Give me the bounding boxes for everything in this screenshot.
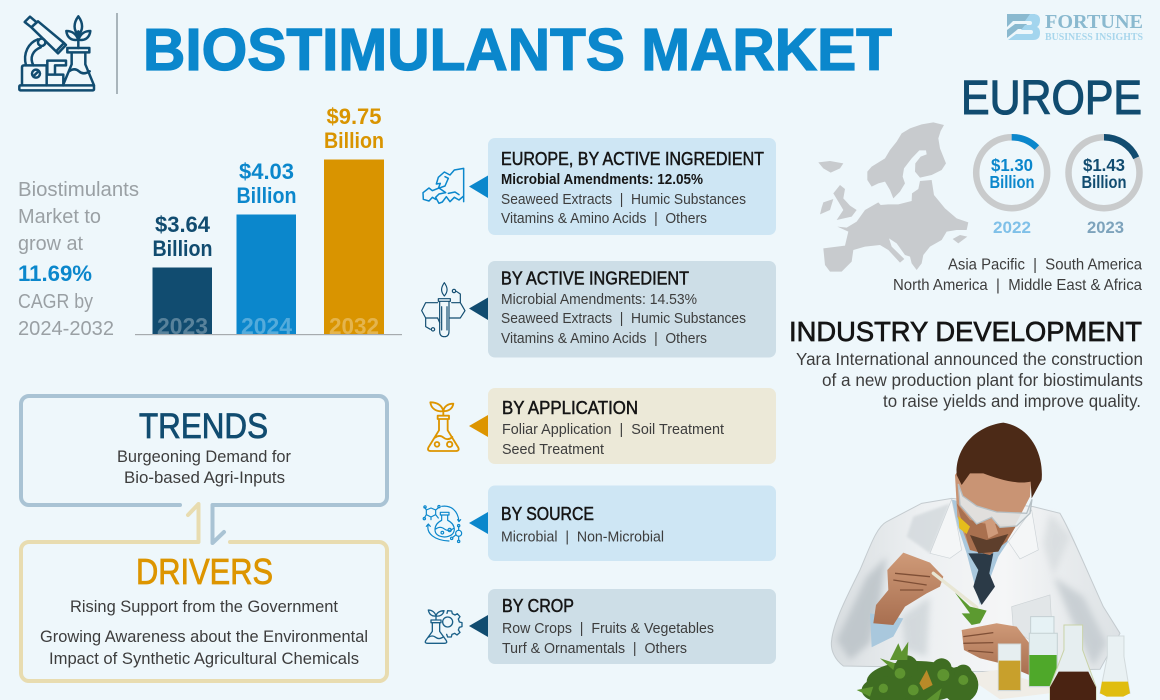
CAGR text block [18, 179, 139, 340]
card: Europe by active ingredient: Microbial Amendments: 12.05% [501, 172, 703, 188]
text: other regions [893, 256, 1142, 294]
bar: 2023: Billion [152, 236, 212, 261]
heading: Europe: EUROPE [961, 72, 1142, 125]
panel: trends [21, 396, 387, 543]
card: Europe by active ingredient [469, 138, 776, 235]
bar: 2032 [324, 104, 384, 339]
chart: Europe 2023 ring: Billion [1082, 172, 1126, 192]
card: by application: Seed Treatment [502, 442, 604, 458]
text: other regions: Asia Pacific | South America [948, 256, 1142, 274]
logo: Fortune Business Insights [1007, 11, 1143, 43]
icon: Europe outline [423, 168, 464, 203]
panel: trends: Bio-based Agri-Inputs [124, 468, 285, 487]
icon: flask with gear [425, 610, 462, 643]
chart: Europe 2022 ring [976, 137, 1047, 237]
card: by source [469, 486, 776, 561]
CAGR text block: 11.69% [18, 261, 92, 286]
bar: 2023: 2023 [157, 313, 208, 339]
CAGR text block: CAGR by [18, 291, 93, 313]
card: by crop: Row Crops | Fruits & Vegetables [502, 621, 714, 637]
card: by application: BY APPLICATION [502, 398, 638, 418]
icon: flask with molecules [423, 505, 462, 542]
panel: drivers: Growing Awareness about the Environmental [40, 627, 368, 646]
bar: 2032: $9.75 [326, 104, 382, 129]
text: industry development: Yara International announced the construction [796, 349, 1143, 369]
logo: Fortune Business Insights: BUSINESS INSIGHTS [1045, 32, 1143, 43]
bar: 2023: $3.64 [155, 212, 211, 237]
card: Europe by active ingredient: Seaweed Extracts | Humic Substances [501, 192, 746, 208]
card: by active ingredient: Microbial Amendments: 14.53% [501, 292, 697, 308]
card: by active ingredient [469, 261, 776, 358]
text: industry development: to raise yields and improve quality. [883, 391, 1141, 411]
card: by source: BY SOURCE [501, 504, 594, 524]
card: by crop [469, 589, 776, 664]
icon: test tube and hexagons [422, 283, 465, 337]
bar: 2032: 2032 [329, 313, 379, 339]
heading: industry development: INDUSTRY DEVELOPMENT [789, 316, 1142, 347]
card: by application [469, 388, 776, 464]
bar: 2024: 2024 [241, 313, 292, 339]
panel: drivers [21, 504, 387, 681]
CAGR text block: Market to [18, 206, 101, 228]
chart: Europe 2023 ring: $1.43 [1083, 155, 1125, 175]
card: by crop: Turf & Ornamentals | Others [502, 641, 687, 657]
panel: drivers: Rising Support from the Government [70, 597, 338, 616]
icon: flask with sprout [428, 402, 459, 451]
chart: Europe 2022 ring: Billion [990, 172, 1034, 192]
card: by crop: BY CROP [502, 596, 574, 616]
map: Europe [818, 122, 968, 272]
bar: 2023 [152, 212, 212, 339]
panel: drivers: Impact of Synthetic Agricultural Chemicals [49, 649, 359, 668]
icon: microscope and plant flask [19, 16, 94, 90]
text: other regions: North America | Middle East & Africa [893, 277, 1142, 294]
bar: 2024: Billion [236, 183, 296, 208]
card: by active ingredient: Vitamins & Amino Acids | Others [501, 331, 707, 347]
panel: trends: TRENDS [139, 407, 268, 446]
bar chart: market size [135, 104, 402, 339]
CAGR text block: grow at [18, 233, 83, 255]
chart: Europe 2022 ring: 2022 [993, 218, 1031, 237]
card: by source: Microbial | Non-Microbial [501, 530, 664, 546]
card: Europe by active ingredient: Vitamins & Amino Acids | Others [501, 211, 707, 227]
chart: Europe 2023 ring [1068, 137, 1140, 237]
bar: 2032: Billion [324, 128, 384, 153]
card: by application: Foliar Application | Soil Treatment [502, 422, 724, 438]
chart: Europe 2023 ring: 2023 [1087, 218, 1124, 237]
CAGR text block: 2024-2032 [18, 318, 114, 340]
bar: 2024: $4.03 [239, 159, 294, 184]
illustration: scientist with plant and flasks [831, 423, 1130, 700]
title: BIOSTIMULANTS MARKET [143, 17, 892, 83]
panel: drivers: DRIVERS [136, 551, 273, 592]
header divider [116, 13, 118, 94]
text: industry development: of a new production plant for biostimulants [822, 370, 1143, 390]
chart: Europe 2022 ring: $1.30 [991, 155, 1033, 175]
card: by active ingredient: Seaweed Extracts | Humic Substances [501, 311, 746, 327]
bar: 2024 [236, 159, 296, 339]
card: by active ingredient: BY ACTIVE INGREDIENT [501, 268, 689, 288]
CAGR text block: Biostimulants [18, 179, 139, 201]
card: Europe by active ingredient: EUROPE, BY ACTIVE INGREDIENT [501, 149, 764, 169]
panel: trends: Burgeoning Demand for [117, 447, 291, 466]
text: industry development [796, 349, 1143, 411]
logo: Fortune Business Insights: FORTUNE [1045, 11, 1143, 33]
